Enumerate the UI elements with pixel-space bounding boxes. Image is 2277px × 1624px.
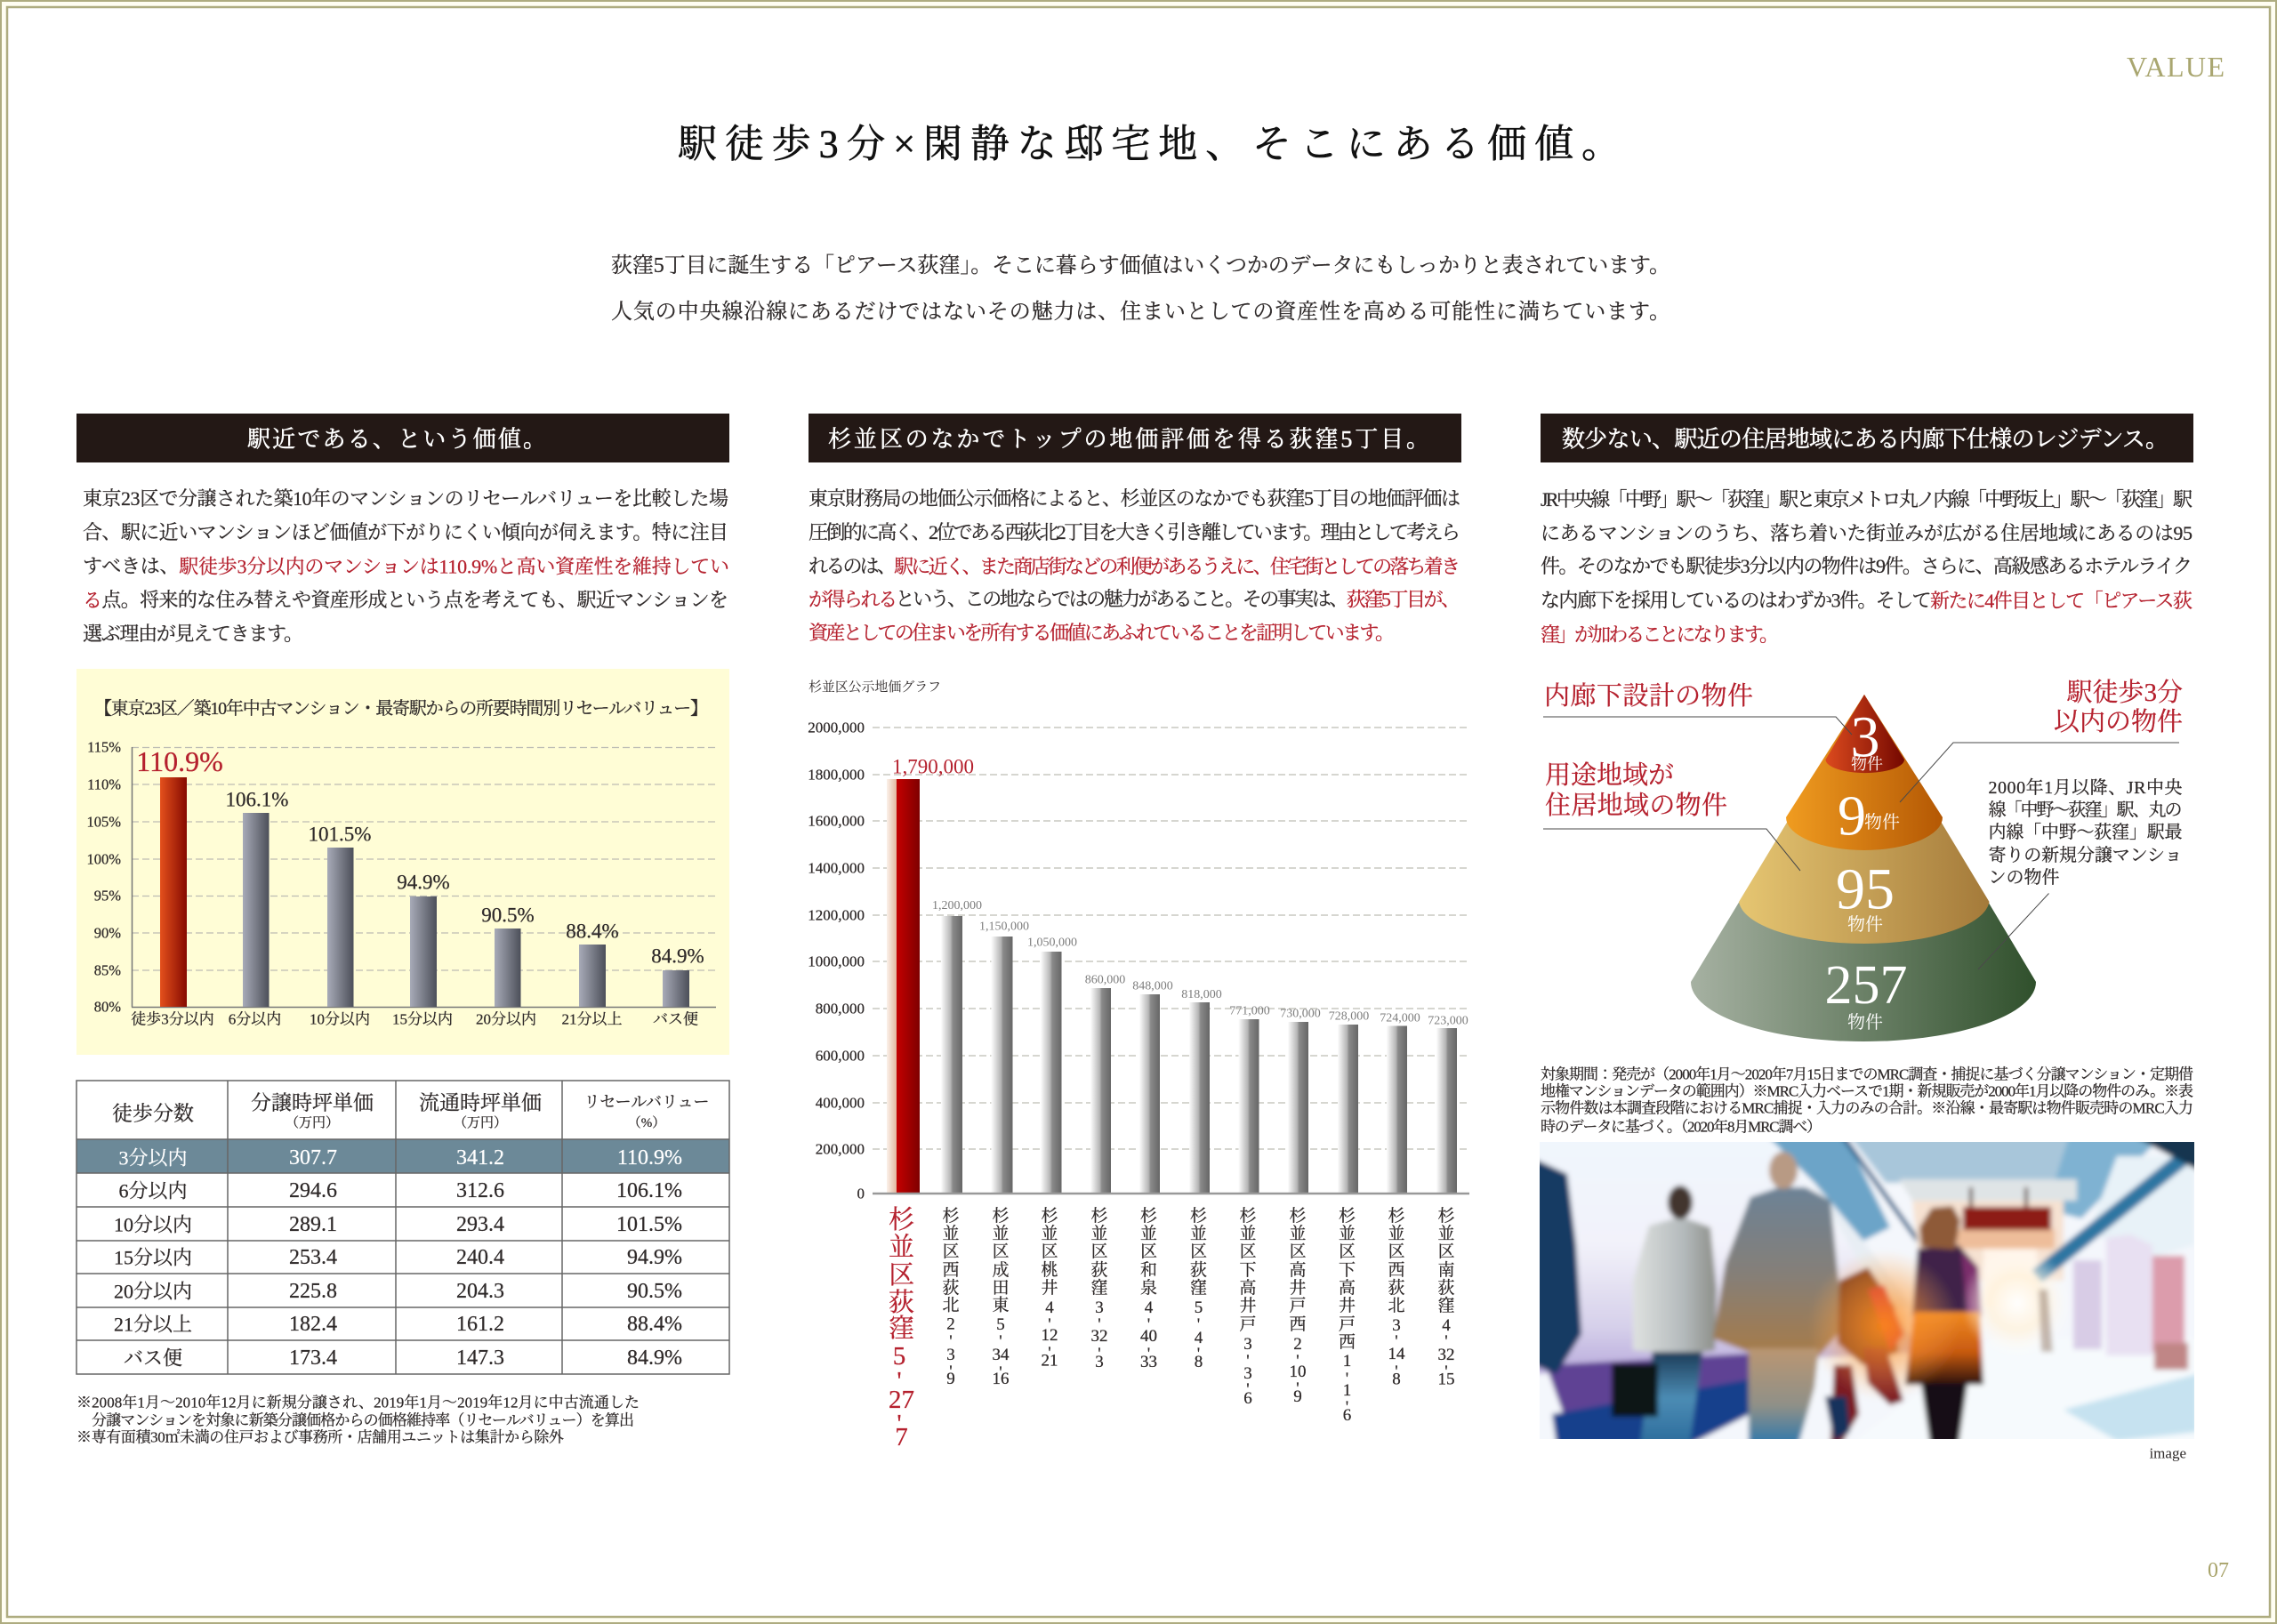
vertical address labels: 杉 bbox=[992, 1206, 1010, 1226]
vertical address labels: 34 bbox=[993, 1345, 1010, 1364]
vertical address labels: 区 bbox=[1090, 1242, 1108, 1261]
body text: left column bbox=[83, 487, 729, 645]
pyramid numbers: 物件 bbox=[1864, 812, 1900, 832]
table header: （%） bbox=[628, 1115, 665, 1130]
vertical address labels: ' bbox=[1395, 1332, 1398, 1350]
bar values bbox=[892, 756, 1468, 1028]
vertical address labels: 40 bbox=[1140, 1327, 1157, 1345]
table rows: 204.3 bbox=[456, 1280, 504, 1303]
callout: new condominiums since 2000: 内線「中野〜荻窪」駅最 bbox=[1989, 822, 2183, 842]
vertical address labels: ' bbox=[897, 1410, 902, 1438]
vertical address labels: ' bbox=[1147, 1345, 1150, 1363]
table header: 流通時坪単価 bbox=[419, 1092, 542, 1113]
y axis labels: 800,000 bbox=[816, 1000, 865, 1017]
table rows: 293.4 bbox=[456, 1213, 504, 1236]
bar values: 730,000 bbox=[1280, 1007, 1321, 1021]
vertical address labels: 並 bbox=[1041, 1224, 1058, 1243]
y axis labels: 1800,000 bbox=[808, 767, 865, 783]
body text: middle column: 東京財務局の地価公示価格によると、杉並区のなかでも荻窪5丁目の地価評価は bbox=[809, 487, 1460, 510]
bar values: 88.4% bbox=[566, 920, 619, 943]
highlighted row: 3 minutes: 3分以内 bbox=[118, 1147, 188, 1169]
vertical address labels: 並 bbox=[1190, 1224, 1207, 1243]
vertical address labels: 並 bbox=[1437, 1224, 1455, 1243]
body text: left column: すべきは、駅徒歩3分以内のマンションは110.9%と高い資産性を維持してい bbox=[83, 555, 729, 577]
vertical address labels: 21 bbox=[1041, 1351, 1058, 1370]
footnote: right column: 対象期間：発売が（2000年1月〜2020年7月15日までのMRC調査・捕捉に基づく分譲マンション・定期借 bbox=[1541, 1065, 2193, 1083]
highlighted row: 3 minutes bbox=[118, 1146, 682, 1170]
table rows: 94.9% bbox=[627, 1246, 682, 1269]
y axis labels: 1600,000 bbox=[808, 813, 865, 829]
footnotes: left column: 分譲マンションを対象に新築分譲価格からの価格維持率（リセールバリュー）を算出 bbox=[92, 1412, 634, 1428]
vertical address labels: 西 bbox=[1339, 1332, 1356, 1352]
y axis labels: 600,000 bbox=[816, 1048, 865, 1064]
y axis labels: 0 bbox=[857, 1185, 865, 1202]
callout: residential zoning bbox=[1543, 760, 1800, 871]
table header: リセールバリュー bbox=[584, 1093, 709, 1111]
vertical address labels: 5 bbox=[1195, 1298, 1203, 1316]
vertical address labels: 8 bbox=[1195, 1352, 1203, 1371]
bar values: 101.5% bbox=[309, 824, 371, 845]
vertical address labels: 8 bbox=[1392, 1370, 1401, 1388]
category labels: 10分以内 bbox=[310, 1010, 370, 1028]
vertical address labels: ' bbox=[1048, 1314, 1051, 1334]
intro text: 荻窪5丁目に誕生する「ピアース荻窪」。そこに暮らす価値はいくつかのデータにもしっかりと表されています。 bbox=[611, 253, 1670, 277]
y axis labels: 1000,000 bbox=[808, 953, 865, 969]
footnotes: left column: ※2008年1月〜2010年12月に新規分譲され、2019年1月〜2019年12月に中古流通した bbox=[76, 1393, 640, 1411]
panel: left column, resale value bbox=[76, 414, 729, 1446]
title: 駅徒歩3分×閑静な邸宅地、そこにある価値。 bbox=[677, 123, 1621, 165]
chart caption: 杉並区公示地価グラフ bbox=[809, 679, 941, 695]
callout: within 3-minute walk bbox=[1900, 678, 2183, 802]
bar values: 90.5% bbox=[481, 904, 535, 927]
body text: right column: 件。そのなかでも駅徒歩3分以内の物件は9件。さらに、高級感あるホテルライク bbox=[1541, 555, 2193, 577]
vertical address labels: 杉 bbox=[1239, 1206, 1257, 1226]
bar values: 818,000 bbox=[1181, 988, 1222, 1001]
bar values bbox=[136, 745, 704, 968]
vertical address labels: 井 bbox=[1041, 1277, 1058, 1297]
vertical address labels: ' bbox=[1246, 1352, 1250, 1370]
vertical address labels: 15 bbox=[1437, 1370, 1455, 1388]
table rows: 240.4 bbox=[456, 1246, 504, 1269]
vertical address labels: 下 bbox=[1239, 1259, 1257, 1279]
vertical address labels: ' bbox=[1098, 1314, 1101, 1334]
vertical address labels: 区 bbox=[942, 1242, 960, 1261]
callout: new condominiums since 2000 bbox=[1978, 777, 2183, 969]
bar chart: resale value by walking time bbox=[76, 669, 729, 1055]
vertical address labels: 3 bbox=[1095, 1298, 1104, 1316]
vertical address labels: 32 bbox=[1437, 1345, 1455, 1364]
vertical address labels: 9 bbox=[946, 1370, 955, 1387]
bar values: 1,050,000 bbox=[1027, 936, 1077, 950]
vertical address labels: 杉 bbox=[1090, 1206, 1108, 1226]
table rows: 106.1% bbox=[616, 1179, 682, 1202]
vertical address labels: 5 bbox=[996, 1314, 1005, 1334]
vertical address labels: 並 bbox=[1090, 1224, 1108, 1243]
vertical address labels: 7 bbox=[895, 1423, 908, 1451]
vertical address labels: 荻 bbox=[889, 1288, 914, 1317]
vertical address labels: ' bbox=[1147, 1314, 1150, 1334]
vertical address labels: 杉 bbox=[1140, 1206, 1157, 1226]
heading: right column bbox=[1541, 414, 2193, 462]
vertical address labels: 北 bbox=[1388, 1295, 1405, 1314]
vertical address labels: 杉 bbox=[1190, 1206, 1207, 1226]
y axis labels: 105% bbox=[87, 813, 121, 831]
vertical address labels: 並 bbox=[942, 1224, 960, 1243]
vertical address labels: 下 bbox=[1339, 1259, 1356, 1279]
vertical address labels: 杉 bbox=[1339, 1206, 1356, 1226]
vertical address labels: 3 bbox=[1243, 1364, 1252, 1382]
vertical address labels: ' bbox=[1098, 1345, 1101, 1363]
vertical address labels: ' bbox=[1444, 1332, 1448, 1350]
section tag: VALUE: VALUE bbox=[2127, 51, 2225, 83]
pyramid layer: 9 bbox=[1786, 695, 1943, 850]
table rows: 253.4 bbox=[289, 1246, 337, 1269]
vertical address labels: ' bbox=[999, 1363, 1002, 1382]
bar values: 1,200,000 bbox=[932, 899, 982, 912]
vertical address labels: 32 bbox=[1090, 1327, 1108, 1345]
heading: left column bbox=[76, 414, 729, 462]
body text: right column bbox=[1541, 488, 2193, 646]
bar values: 1,150,000 bbox=[979, 920, 1029, 934]
vertical address labels: 3 bbox=[946, 1345, 955, 1364]
vertical address labels: 荻 bbox=[942, 1277, 960, 1297]
heading: left column: 駅近である、という価値。 bbox=[246, 427, 546, 452]
table rows: 10分以内 bbox=[114, 1213, 192, 1236]
vertical address labels: 9 bbox=[1293, 1387, 1302, 1405]
footnote: right column: 示物件数は本調査段階におけるMRC捕捉・入力のみの合計。※沿線・最寄駅は物件販売時のMRC入力 bbox=[1541, 1099, 2193, 1117]
bar values: 771,000 bbox=[1229, 1005, 1270, 1017]
vertical address labels: 並 bbox=[889, 1233, 914, 1261]
body text: right column: な内廊下を採用しているのはわずか3件。そして新たに4件目として「ピアース荻 bbox=[1541, 589, 2193, 612]
table rows: 101.5% bbox=[616, 1213, 682, 1236]
callout: new condominiums since 2000: 線「中野〜荻窪」駅、丸の bbox=[1989, 800, 2183, 820]
pyramid numbers: 257 bbox=[1825, 955, 1907, 1016]
vertical address labels: 北 bbox=[942, 1295, 960, 1314]
vertical address labels: 井 bbox=[1239, 1295, 1257, 1314]
body text: left column: 合、駅に近いマンションほど価値が下がりにくい傾向が伺えます。特に注目 bbox=[83, 521, 728, 543]
vertical address labels: ' bbox=[1296, 1379, 1299, 1398]
vertical address labels: 杉 bbox=[942, 1206, 960, 1226]
vertical address labels: 区 bbox=[1388, 1242, 1405, 1261]
vertical address labels: 並 bbox=[992, 1224, 1010, 1243]
table rows: 173.4 bbox=[289, 1347, 337, 1370]
pyramid layer: 257 bbox=[1691, 695, 2036, 1041]
y axis labels: 80% bbox=[94, 998, 121, 1016]
table rows: 294.6 bbox=[289, 1179, 337, 1202]
vertical address labels: 並 bbox=[1140, 1224, 1157, 1243]
vertical address labels: 区 bbox=[1339, 1242, 1356, 1261]
vertical address labels: 高 bbox=[1339, 1277, 1356, 1297]
table rows: 20分以内 bbox=[114, 1281, 192, 1302]
table rows: 88.4% bbox=[627, 1313, 682, 1336]
heading: middle column: 杉並区のなかでトップの地価評価を得る荻窪5丁目。 bbox=[828, 427, 1429, 452]
vertical address labels: 杉 bbox=[1388, 1206, 1405, 1226]
bar values: 860,000 bbox=[1085, 973, 1125, 987]
body text: right column: 窪」が加わることになります。 bbox=[1541, 623, 1779, 646]
vertical address labels: 4 bbox=[1442, 1316, 1451, 1334]
pyramid numbers: 95 bbox=[1836, 857, 1895, 921]
table rows: バス便 bbox=[124, 1347, 182, 1370]
vertical address labels: 戸 bbox=[1339, 1314, 1356, 1334]
vertical address labels: ' bbox=[1395, 1363, 1398, 1380]
vertical address labels: 杉 bbox=[1041, 1206, 1058, 1226]
vertical address labels: ' bbox=[999, 1332, 1002, 1350]
callout: inner corridor: 内廊下設計の物件 bbox=[1544, 681, 1753, 711]
vertical address labels: ' bbox=[1346, 1398, 1348, 1416]
vertical address labels: 12 bbox=[1041, 1325, 1058, 1345]
vertical address labels: 西 bbox=[1388, 1259, 1405, 1279]
table header: 分譲時坪単価 bbox=[251, 1092, 374, 1113]
vertical address labels: 窪 bbox=[1437, 1295, 1455, 1314]
body text: middle column: が得られるという、この地ならではの魅力があること。その事実は、荻窪5丁目が、 bbox=[809, 588, 1460, 610]
table rows: 90.5% bbox=[627, 1280, 682, 1303]
vertical address labels: 区 bbox=[1289, 1242, 1307, 1261]
bar values: 723,000 bbox=[1428, 1014, 1468, 1028]
vertical address labels: 区 bbox=[889, 1261, 914, 1290]
y axis labels bbox=[808, 719, 865, 1202]
body text: middle column: 資産としての住まいを所有する価値にあふれていることを証明しています。 bbox=[809, 622, 1395, 644]
vertical address labels: 西 bbox=[942, 1259, 960, 1279]
vertical address labels: ' bbox=[1197, 1314, 1200, 1334]
table rows: 84.9% bbox=[627, 1347, 682, 1370]
vertical address labels: 区 bbox=[1239, 1242, 1257, 1261]
body text: right column: JR中央線「中野」駅〜「荻窪」駅と東京メトロ丸ノ内線「中野坂上」駅〜「荻窪」駅 bbox=[1541, 488, 2193, 511]
vertical address labels: 杉 bbox=[889, 1205, 914, 1234]
vertical address labels: 3 bbox=[1095, 1352, 1104, 1371]
vertical address labels: ' bbox=[1048, 1343, 1051, 1363]
vertical address labels: 16 bbox=[993, 1370, 1009, 1387]
category labels: 徒歩3分以内 bbox=[131, 1010, 214, 1028]
vertical address labels: 4 bbox=[1195, 1329, 1203, 1347]
intro text: 人気の中央線沿線にあるだけではないその魅力は、住まいとしての資産性を高める可能性に満ちています。 bbox=[611, 300, 1670, 324]
vertical address labels: ' bbox=[949, 1363, 953, 1380]
callout: within 3-minute walk: 駅徒歩3分 bbox=[2065, 678, 2183, 707]
vertical address labels: 6 bbox=[1343, 1405, 1351, 1425]
body text: left column: 東京23区で分譲された築10年のマンションのリセールバリューを比較した場 bbox=[83, 487, 728, 510]
vertical address labels: 並 bbox=[1388, 1224, 1405, 1243]
body text: left column: 選ぶ理由が見えてきます。 bbox=[83, 623, 303, 645]
vertical address labels: 南 bbox=[1437, 1259, 1455, 1279]
data table: walking time and price bbox=[76, 1081, 729, 1374]
page number: 07 bbox=[2208, 1559, 2229, 1582]
vertical address labels: 井 bbox=[1339, 1295, 1356, 1314]
vertical address labels: 窪 bbox=[1190, 1277, 1207, 1297]
table rows: 312.6 bbox=[456, 1179, 504, 1202]
pyramid numbers: 9 bbox=[1838, 784, 1866, 847]
table rows bbox=[114, 1179, 682, 1370]
vertical address labels: 1 bbox=[1343, 1352, 1351, 1370]
footnote: right column: 時のデータに基づく。（2020年8月MRC調べ） bbox=[1541, 1117, 1822, 1135]
vertical address labels: 27 bbox=[889, 1386, 914, 1414]
vertical address labels: 3 bbox=[1243, 1334, 1252, 1354]
vertical address labels: 2 bbox=[1293, 1334, 1302, 1354]
vertical address labels: 14 bbox=[1388, 1345, 1405, 1363]
table rows: 161.2 bbox=[456, 1313, 504, 1336]
vertical address labels: 成 bbox=[992, 1259, 1010, 1279]
callout: residential zoning: 用途地域が bbox=[1545, 760, 1674, 790]
vertical address labels: 桃 bbox=[1041, 1259, 1058, 1279]
callout: inner corridor bbox=[1543, 681, 1852, 735]
vertical address labels: 区 bbox=[992, 1242, 1010, 1261]
body text: middle column: れるのは、駅に近く、また商店街などの利便があるうえに、住宅街としての落ち着き bbox=[809, 555, 1460, 577]
category labels: 20分以内 bbox=[476, 1010, 536, 1028]
pyramid numbers: 物件 bbox=[1851, 755, 1883, 773]
pyramid numbers: 物件 bbox=[1847, 914, 1883, 935]
callout: new condominiums since 2000: ンの物件 bbox=[1989, 867, 2060, 888]
callout: within 3-minute walk: 以内の物件 bbox=[2054, 707, 2183, 736]
vertical address labels: ' bbox=[949, 1332, 953, 1350]
bar values: 728,000 bbox=[1329, 1010, 1369, 1023]
category labels: 6分以内 bbox=[229, 1010, 281, 1028]
table rows: 289.1 bbox=[289, 1213, 337, 1236]
vertical address labels: 区 bbox=[1437, 1242, 1455, 1261]
callout: new condominiums since 2000: 寄りの新規分譲マンショ bbox=[1989, 845, 2183, 865]
vertical address labels: 1 bbox=[1343, 1380, 1351, 1400]
vertical address labels: 窪 bbox=[889, 1314, 914, 1343]
y axis labels: 110% bbox=[87, 776, 121, 793]
photo: commuters on a station platform bbox=[1534, 1137, 2201, 1444]
pyramid layer: 95 bbox=[1739, 695, 1989, 944]
footnote: right column bbox=[1541, 1065, 2193, 1135]
body text: middle column: 圧倒的に高く、2位である西荻北2丁目を大きく引き離しています。理由として考えら bbox=[809, 521, 1460, 543]
vertical address labels: ' bbox=[897, 1367, 902, 1395]
callout: new condominiums since 2000: 2000年1月以降、JR中央 bbox=[1989, 777, 2183, 798]
panel: middle column, land price bbox=[808, 414, 1469, 1451]
heading: middle column bbox=[809, 414, 1461, 462]
vertical address labels: 2 bbox=[946, 1314, 955, 1333]
y axis labels bbox=[87, 738, 121, 1016]
vertical address labels: ' bbox=[1346, 1370, 1348, 1387]
vertical address labels: 並 bbox=[1239, 1224, 1257, 1243]
table rows: 182.4 bbox=[289, 1313, 337, 1336]
bar values: 84.9% bbox=[651, 945, 704, 968]
table rows: 21分以上 bbox=[114, 1313, 192, 1336]
vertical address labels: 4 bbox=[1145, 1298, 1154, 1316]
vertical address labels: 高 bbox=[1289, 1259, 1307, 1279]
vertical address labels bbox=[889, 1205, 1455, 1451]
vertical address labels: 杉 bbox=[1289, 1206, 1307, 1226]
highlighted row: 3 minutes: 307.7 bbox=[289, 1146, 337, 1170]
category labels: バス便 bbox=[653, 1010, 698, 1028]
y axis labels: 2000,000 bbox=[808, 719, 865, 736]
vertical address labels: 東 bbox=[992, 1295, 1010, 1314]
table rows: 147.3 bbox=[456, 1347, 504, 1370]
body text: right column: にあるマンションのうち、落ち着いた街並みが広がる住居地域にあるのは95 bbox=[1541, 522, 2193, 544]
vertical address labels: 荻 bbox=[1437, 1277, 1455, 1297]
vertical address labels: ' bbox=[1444, 1363, 1448, 1380]
highlighted row: 3 minutes: 341.2 bbox=[456, 1146, 504, 1170]
category labels: 21分以上 bbox=[562, 1010, 623, 1028]
intro text bbox=[611, 253, 1670, 324]
footnote: right column: 地権マンションデータの範囲内）※MRC入力ベースで1期・新規販売が2000年1月以降の物件のみ。※表 bbox=[1541, 1081, 2193, 1099]
bar values: 1,790,000 bbox=[892, 756, 974, 777]
highlighted row: 3 minutes: 110.9% bbox=[617, 1146, 682, 1170]
y axis labels: 400,000 bbox=[816, 1094, 865, 1112]
y axis labels: 85% bbox=[94, 962, 121, 978]
vertical address labels: 荻 bbox=[1388, 1277, 1405, 1297]
body text: left column: る点。将来的な住み替えや資産形成という点を考えても、駅近マンションを bbox=[83, 589, 728, 611]
pyramid diagram bbox=[1543, 678, 2183, 1041]
bars bbox=[160, 777, 689, 1007]
vertical address labels: 戸 bbox=[1239, 1314, 1257, 1334]
heading: right column: 数少ない、駅近の住居地域にある内廊下仕様のレジデンス。 bbox=[1562, 427, 2168, 452]
bar chart: Suginami land prices bbox=[808, 679, 1469, 1451]
table header bbox=[112, 1092, 709, 1130]
y axis labels: 200,000 bbox=[816, 1140, 865, 1158]
vertical address labels: 33 bbox=[1140, 1352, 1157, 1371]
y axis labels: 90% bbox=[94, 925, 121, 941]
y axis labels: 1400,000 bbox=[808, 859, 865, 877]
bar values: 94.9% bbox=[397, 872, 450, 893]
table rows: 15分以内 bbox=[114, 1247, 192, 1268]
y axis labels: 1200,000 bbox=[808, 907, 865, 923]
pyramid numbers: 物件 bbox=[1847, 1012, 1883, 1033]
vertical address labels: ' bbox=[1246, 1380, 1250, 1398]
callout: residential zoning: 住居地域の物件 bbox=[1545, 791, 1727, 820]
vertical address labels: 6 bbox=[1243, 1389, 1252, 1407]
footnotes: left column bbox=[76, 1393, 640, 1446]
chart title: 【東京23区／築10年中古マンション・最寄駅からの所要時間別リセールバリュー】 bbox=[94, 698, 708, 719]
bar values: 106.1% bbox=[226, 788, 288, 811]
vertical address labels: 並 bbox=[1289, 1224, 1307, 1243]
vertical address labels: 4 bbox=[1045, 1298, 1054, 1316]
vertical address labels: 戸 bbox=[1289, 1295, 1307, 1314]
vertical address labels: 荻 bbox=[1090, 1259, 1108, 1279]
vertical address labels: 泉 bbox=[1140, 1277, 1157, 1297]
pyramid layer: 3 bbox=[1825, 695, 1904, 773]
category labels: 15分以内 bbox=[392, 1010, 453, 1028]
photo caption: image bbox=[2149, 1444, 2186, 1462]
table header: （万円） bbox=[286, 1115, 339, 1130]
vertical address labels: 田 bbox=[992, 1279, 1010, 1297]
vertical address labels: 10 bbox=[1290, 1363, 1306, 1380]
vertical address labels: 西 bbox=[1289, 1314, 1307, 1334]
y axis labels: 95% bbox=[94, 888, 121, 904]
bar values: 848,000 bbox=[1132, 980, 1173, 993]
y axis labels: 115% bbox=[87, 738, 121, 756]
bars bbox=[887, 779, 1457, 1194]
pyramid numbers bbox=[1825, 704, 1907, 1033]
vertical address labels: 杉 bbox=[1437, 1206, 1455, 1226]
vertical address labels: 並 bbox=[1339, 1224, 1356, 1243]
vertical address labels: ' bbox=[1296, 1352, 1299, 1370]
table rows: 225.8 bbox=[289, 1280, 337, 1303]
bar values: 724,000 bbox=[1380, 1012, 1420, 1025]
vertical address labels: 荻 bbox=[1190, 1259, 1207, 1279]
vertical address labels: 5 bbox=[893, 1342, 905, 1371]
panel: right column, inner-corridor residences bbox=[1534, 414, 2201, 1462]
vertical address labels: 窪 bbox=[1090, 1277, 1108, 1297]
vertical address labels: 和 bbox=[1140, 1259, 1157, 1279]
vertical address labels: 区 bbox=[1190, 1242, 1207, 1261]
bar values: 110.9% bbox=[136, 745, 223, 777]
vertical address labels: ' bbox=[1197, 1345, 1200, 1363]
table header: （万円） bbox=[454, 1115, 507, 1130]
vertical address labels: 区 bbox=[1041, 1242, 1058, 1261]
vertical address labels: 3 bbox=[1392, 1316, 1401, 1334]
vertical address labels: 高 bbox=[1239, 1277, 1257, 1297]
pyramid numbers: 3 bbox=[1850, 704, 1880, 770]
category labels bbox=[131, 1010, 698, 1028]
table rows: 6分以内 bbox=[118, 1179, 188, 1202]
y axis labels: 100% bbox=[87, 850, 121, 868]
footnotes: left column: ※専有面積30㎡未満の住戸および事務所・店舗用ユニットは集計から除外 bbox=[76, 1428, 564, 1446]
vertical address labels: 区 bbox=[1140, 1242, 1157, 1261]
body text: middle column bbox=[809, 487, 1460, 644]
table header: 徒歩分数 bbox=[112, 1103, 194, 1124]
vertical address labels: 井 bbox=[1289, 1277, 1307, 1297]
